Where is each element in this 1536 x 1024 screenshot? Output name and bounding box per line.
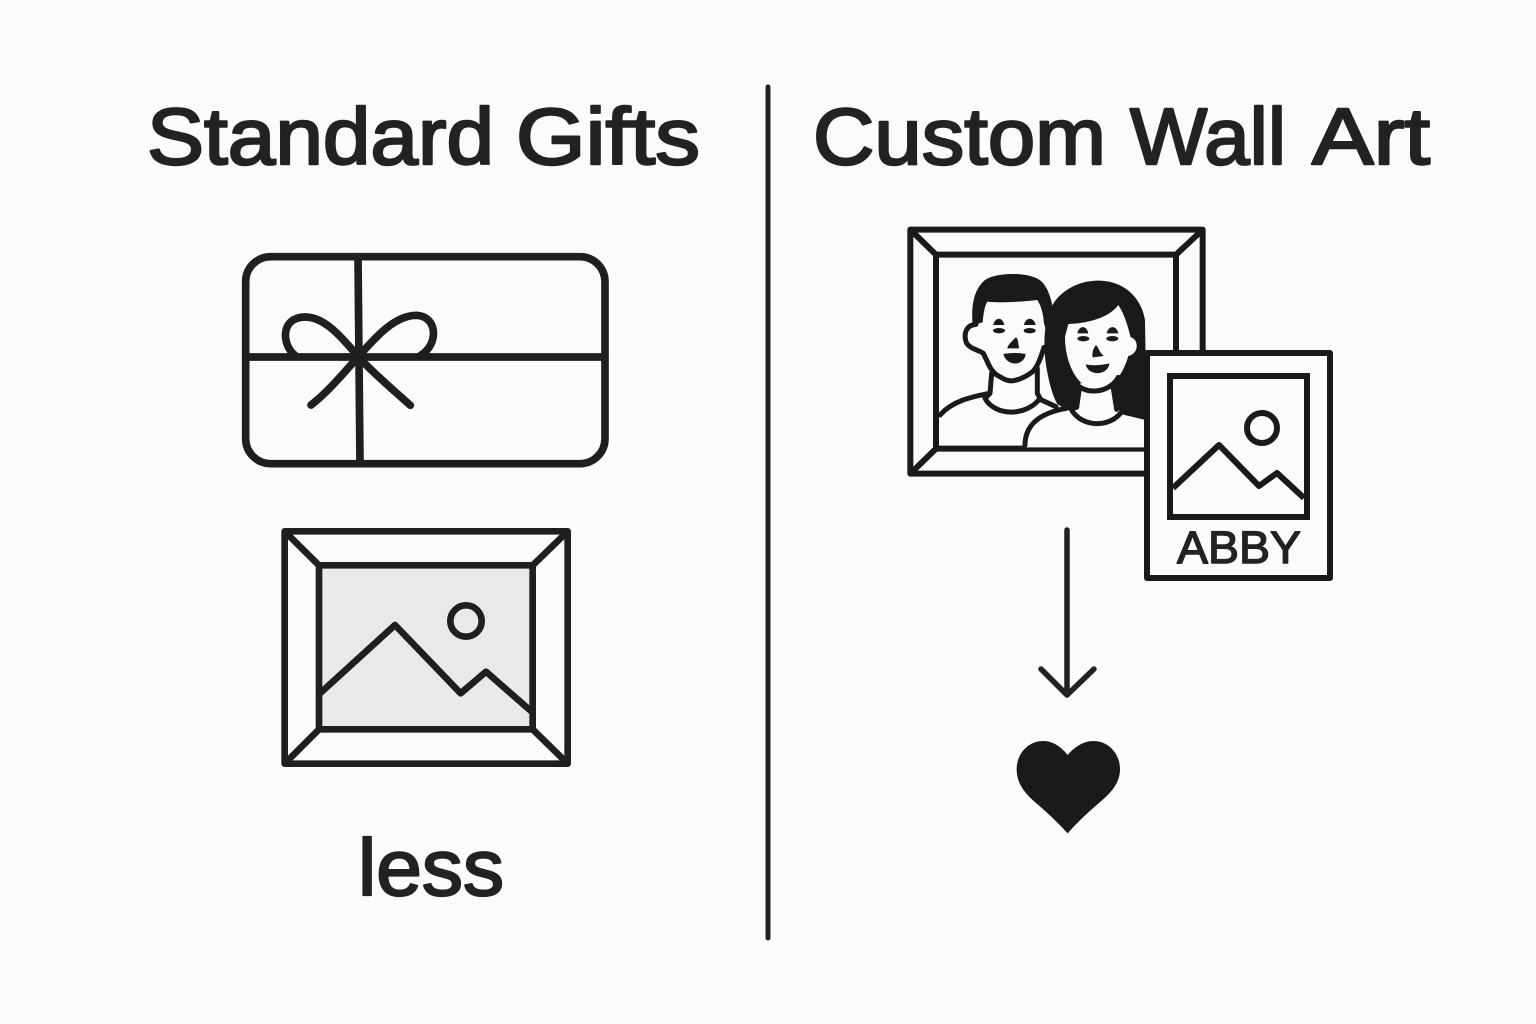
heading: Custom Wall Art	[813, 92, 1430, 181]
heading: Standard Gifts: Gifts	[516, 92, 700, 181]
icon: heart	[1017, 741, 1120, 833]
heading: Standard Gifts: Standard	[147, 92, 494, 181]
icon: framed couple portrait	[910, 230, 1203, 474]
icon: gift card with ribbon bow	[246, 257, 605, 464]
heading: Custom Wall Art: Art	[1312, 92, 1430, 181]
heading: Standard Gifts	[147, 92, 700, 181]
arrow down to heart	[1041, 530, 1094, 695]
icon: generic framed landscape picture	[285, 531, 568, 764]
label: less: less	[358, 823, 504, 912]
heading: Custom Wall Art: Custom	[813, 92, 1106, 181]
center divider	[766, 87, 770, 938]
icon: ABBY personalised print	[1147, 353, 1330, 578]
man figure	[940, 274, 1056, 415]
heading: Custom Wall Art: Wall	[1130, 92, 1286, 181]
woman figure	[1025, 281, 1147, 447]
print name label: ABBY	[1177, 522, 1301, 573]
